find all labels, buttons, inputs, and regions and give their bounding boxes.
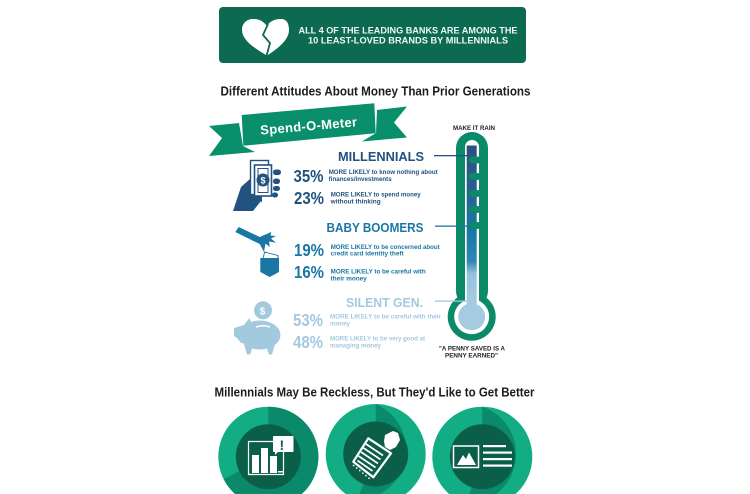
- stat: 16%: their money: [331, 275, 367, 282]
- icon: piggy bank with coin: [234, 301, 280, 354]
- stat: 16%: 16%: [294, 262, 324, 282]
- stat: 35%: [294, 166, 438, 186]
- stat: 19%: credit card identity theft: [331, 250, 404, 258]
- stat: 48%: managing money: [330, 342, 382, 350]
- section: millennials: [233, 149, 467, 211]
- stat: 35%: MORE LIKELY to know nothing about: [329, 169, 438, 176]
- stat: 23%: MORE LIKELY to spend money: [331, 192, 421, 199]
- stat: 19%: MORE LIKELY to be concerned about: [331, 244, 440, 251]
- heading: different attitudes: Different Attitudes About Money Than Prior Generations: [220, 84, 531, 98]
- banner text: [298, 26, 518, 46]
- stat: 23%: 23%: [294, 188, 324, 208]
- stat: 48%: [293, 332, 425, 352]
- section: silent generation: SILENT GEN.: [346, 295, 423, 310]
- stat: 19%: 19%: [294, 240, 324, 260]
- icon: hand holding money: $: [260, 176, 266, 186]
- icon: hand dropping card in pocket: [235, 227, 279, 277]
- stat: 53%: [293, 310, 442, 330]
- label: a penny saved: "A PENNY SAVED IS A: [439, 346, 505, 352]
- heading: reckless but want better: Millennials May Be Reckless, But They'd Like to Get Better: [214, 386, 535, 400]
- circle icon: notepad and pen: [326, 404, 426, 494]
- stat: 53%: 53%: [293, 310, 323, 330]
- circle icon: article with image: [432, 407, 532, 494]
- stat: 48%: MORE LIKELY to be very good at: [330, 336, 425, 342]
- icon: broken heart: [242, 19, 289, 56]
- stat: 53%: money: [330, 320, 351, 328]
- stat: 23%: [294, 188, 421, 208]
- stat: 35%: finances/investments: [329, 176, 392, 183]
- section: baby boomers: [235, 220, 467, 282]
- thermometer: [439, 125, 505, 360]
- icon: piggy bank with coin: $: [260, 306, 266, 317]
- stat: 16%: [294, 262, 426, 282]
- stat: 35%: 35%: [294, 166, 324, 186]
- ribbon: Spend-O-Meter: Spend-O-Meter: [260, 114, 358, 138]
- circle icon: chart with alert: !: [280, 437, 284, 453]
- stat: 16%: MORE LIKELY to be careful with: [331, 268, 426, 275]
- stat: 19%: [294, 240, 440, 260]
- section: millennials: MILLENNIALS: [338, 149, 424, 164]
- stat: 48%: 48%: [293, 332, 323, 352]
- circle icon: chart with alert: [218, 407, 318, 494]
- thermometer ticks: [469, 156, 481, 229]
- ribbon: Spend-O-Meter: [209, 103, 407, 156]
- stat: 23%: without thinking: [330, 199, 381, 206]
- section: baby boomers: BABY BOOMERS: [326, 220, 424, 235]
- section: silent generation: [234, 295, 468, 354]
- banner text: 10 LEAST-LOVED BRANDS BY MILLENNIALS: [308, 36, 508, 46]
- stat: 53%: MORE LIKELY to be careful with their: [330, 314, 442, 320]
- label: make it rain: MAKE IT RAIN: [453, 125, 495, 132]
- banner: least-loved brands: [219, 7, 526, 63]
- label: a penny saved: PENNY EARNED": [445, 352, 498, 360]
- banner text: ALL 4 OF THE LEADING BANKS ARE AMONG THE: [298, 26, 518, 36]
- icon: hand holding money: [233, 160, 281, 211]
- label: a penny saved: [439, 346, 505, 360]
